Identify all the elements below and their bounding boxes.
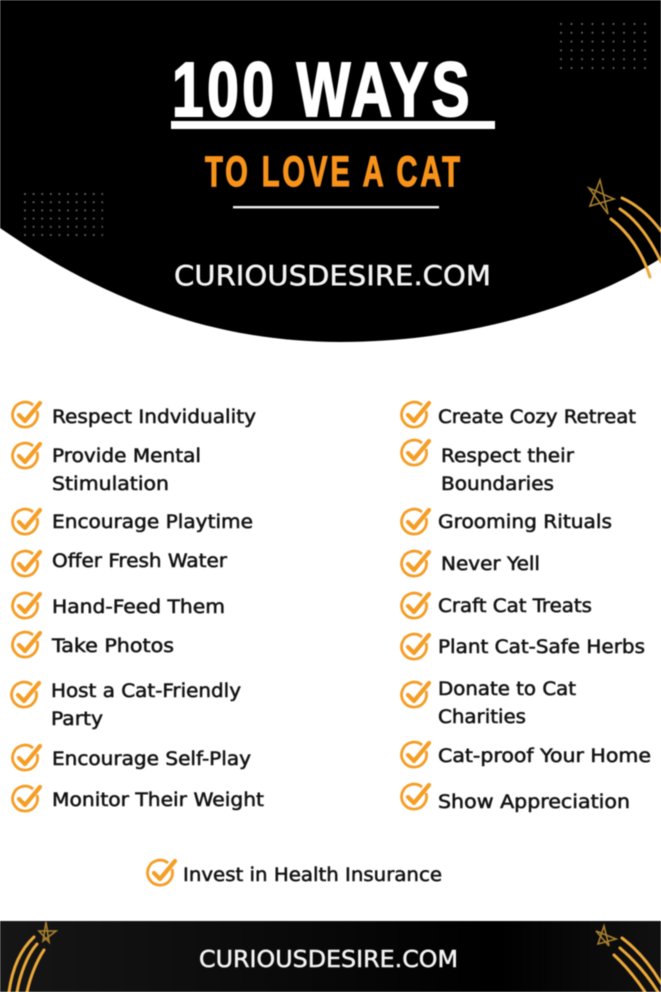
dot grid: left: [24, 193, 103, 236]
icon: shooting star top right: [589, 180, 661, 277]
panel: black header with curved bottom: [0, 0, 661, 342]
item: Grooming Rituals: [438, 512, 612, 533]
icon: check: [13, 593, 40, 618]
subtitle rule: [233, 206, 439, 208]
item: Host a Cat-Friendly: [51, 681, 241, 702]
icon: check: [402, 784, 429, 809]
icon: check: [402, 551, 429, 576]
icon: check: [13, 551, 40, 576]
panel: footer bar: [0, 921, 661, 992]
icon: check: [402, 440, 429, 465]
item: Create Cozy Retreat: [438, 407, 636, 428]
item: Donate to Cat: [438, 679, 576, 700]
icon: shooting star footer right: [596, 926, 661, 992]
item: Charities: [438, 707, 526, 728]
icon: check: [13, 443, 40, 468]
header website: CURIOUSDESIRE.COM: [174, 259, 491, 292]
item: Never Yell: [441, 554, 540, 575]
item: Encourage Playtime: [52, 512, 253, 533]
item: Stimulation: [52, 474, 169, 495]
icon: check: [12, 682, 39, 707]
item: Boundaries: [441, 474, 554, 495]
item: Offer Fresh Water: [52, 551, 227, 572]
icon: check: [13, 509, 40, 534]
item: [441, 446, 574, 495]
item: Invest in Health Insurance: [183, 865, 442, 886]
icon: check: [13, 632, 40, 657]
item: [438, 679, 576, 728]
item: Monitor Their Weight: [52, 790, 264, 811]
item: Provide Mental: [52, 446, 201, 467]
item: Respect Indviduality: [52, 407, 256, 428]
icon: check: [402, 402, 429, 427]
title underline: [171, 121, 495, 129]
title: 100 Ways: 100 WAYS: [172, 48, 469, 133]
icon: check: [402, 509, 429, 534]
icon: check: [13, 745, 40, 770]
footer website: CURIOUSDESIRE.COM: [199, 947, 458, 973]
item: Craft Cat Treats: [438, 596, 592, 617]
item: Encourage Self-Play: [52, 749, 251, 770]
subtitle: To Love a Cat: TO LOVE A CAT: [205, 147, 460, 195]
item: [51, 681, 241, 730]
icon: shooting star footer left: [9, 922, 56, 992]
item: Show Appreciation: [438, 792, 630, 813]
item: Take Photos: [51, 636, 174, 657]
item: [52, 446, 201, 495]
icon: check: [148, 860, 175, 885]
item: Party: [51, 709, 103, 730]
icon: check: [13, 402, 40, 427]
item: Cat-proof Your Home: [438, 746, 651, 767]
icon: check: [402, 742, 429, 767]
icon: check: [402, 593, 429, 618]
icon: check: [402, 682, 429, 707]
icon: check: [402, 634, 429, 659]
icon: check: [13, 786, 40, 811]
item: Respect their: [441, 446, 574, 467]
dot grid: top right: [560, 23, 647, 69]
item: Plant Cat-Safe Herbs: [438, 637, 645, 658]
item: Hand-Feed Them: [52, 597, 225, 618]
